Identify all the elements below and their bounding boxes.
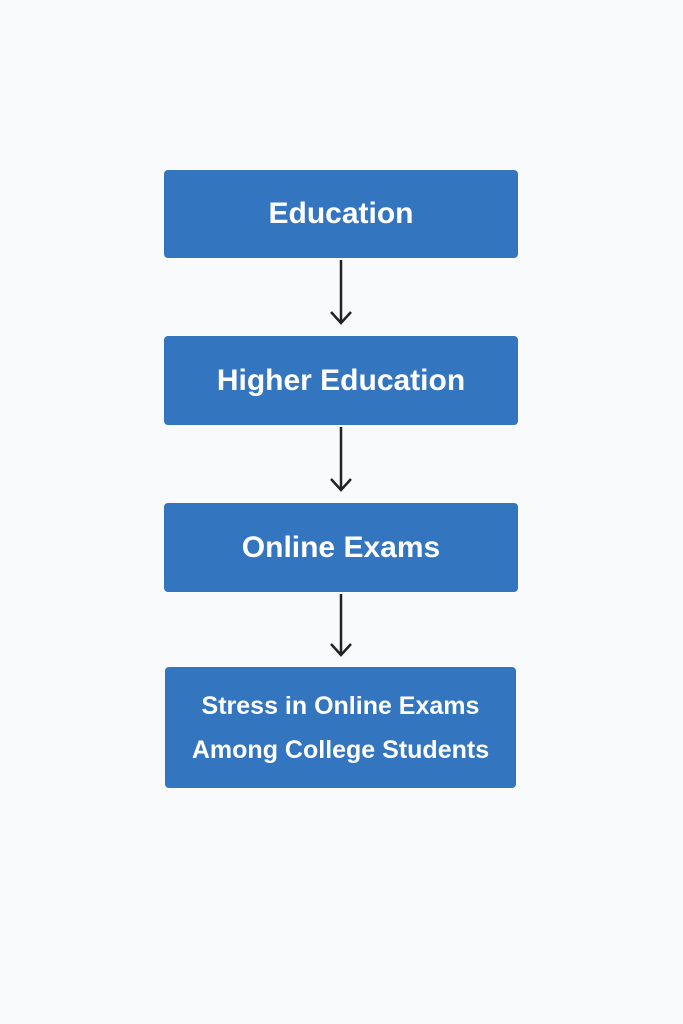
arrow 3: [330, 594, 352, 657]
box: Education: [164, 170, 518, 258]
box: Stress in Online Exams: [165, 667, 516, 788]
box: Higher Education: [164, 336, 518, 425]
arrow 2: [330, 427, 352, 492]
box: Stress in Online Exams: Stress in Online Exams: [202, 692, 479, 720]
box: Higher Education: Higher Education: [217, 364, 465, 396]
arrow 1: [330, 260, 352, 325]
box: Stress in Online Exams: Among College Students: [192, 736, 489, 764]
box: Online Exams: Online Exams: [242, 530, 440, 564]
box: Education: Education: [268, 197, 414, 230]
box: Online Exams: [164, 503, 518, 592]
